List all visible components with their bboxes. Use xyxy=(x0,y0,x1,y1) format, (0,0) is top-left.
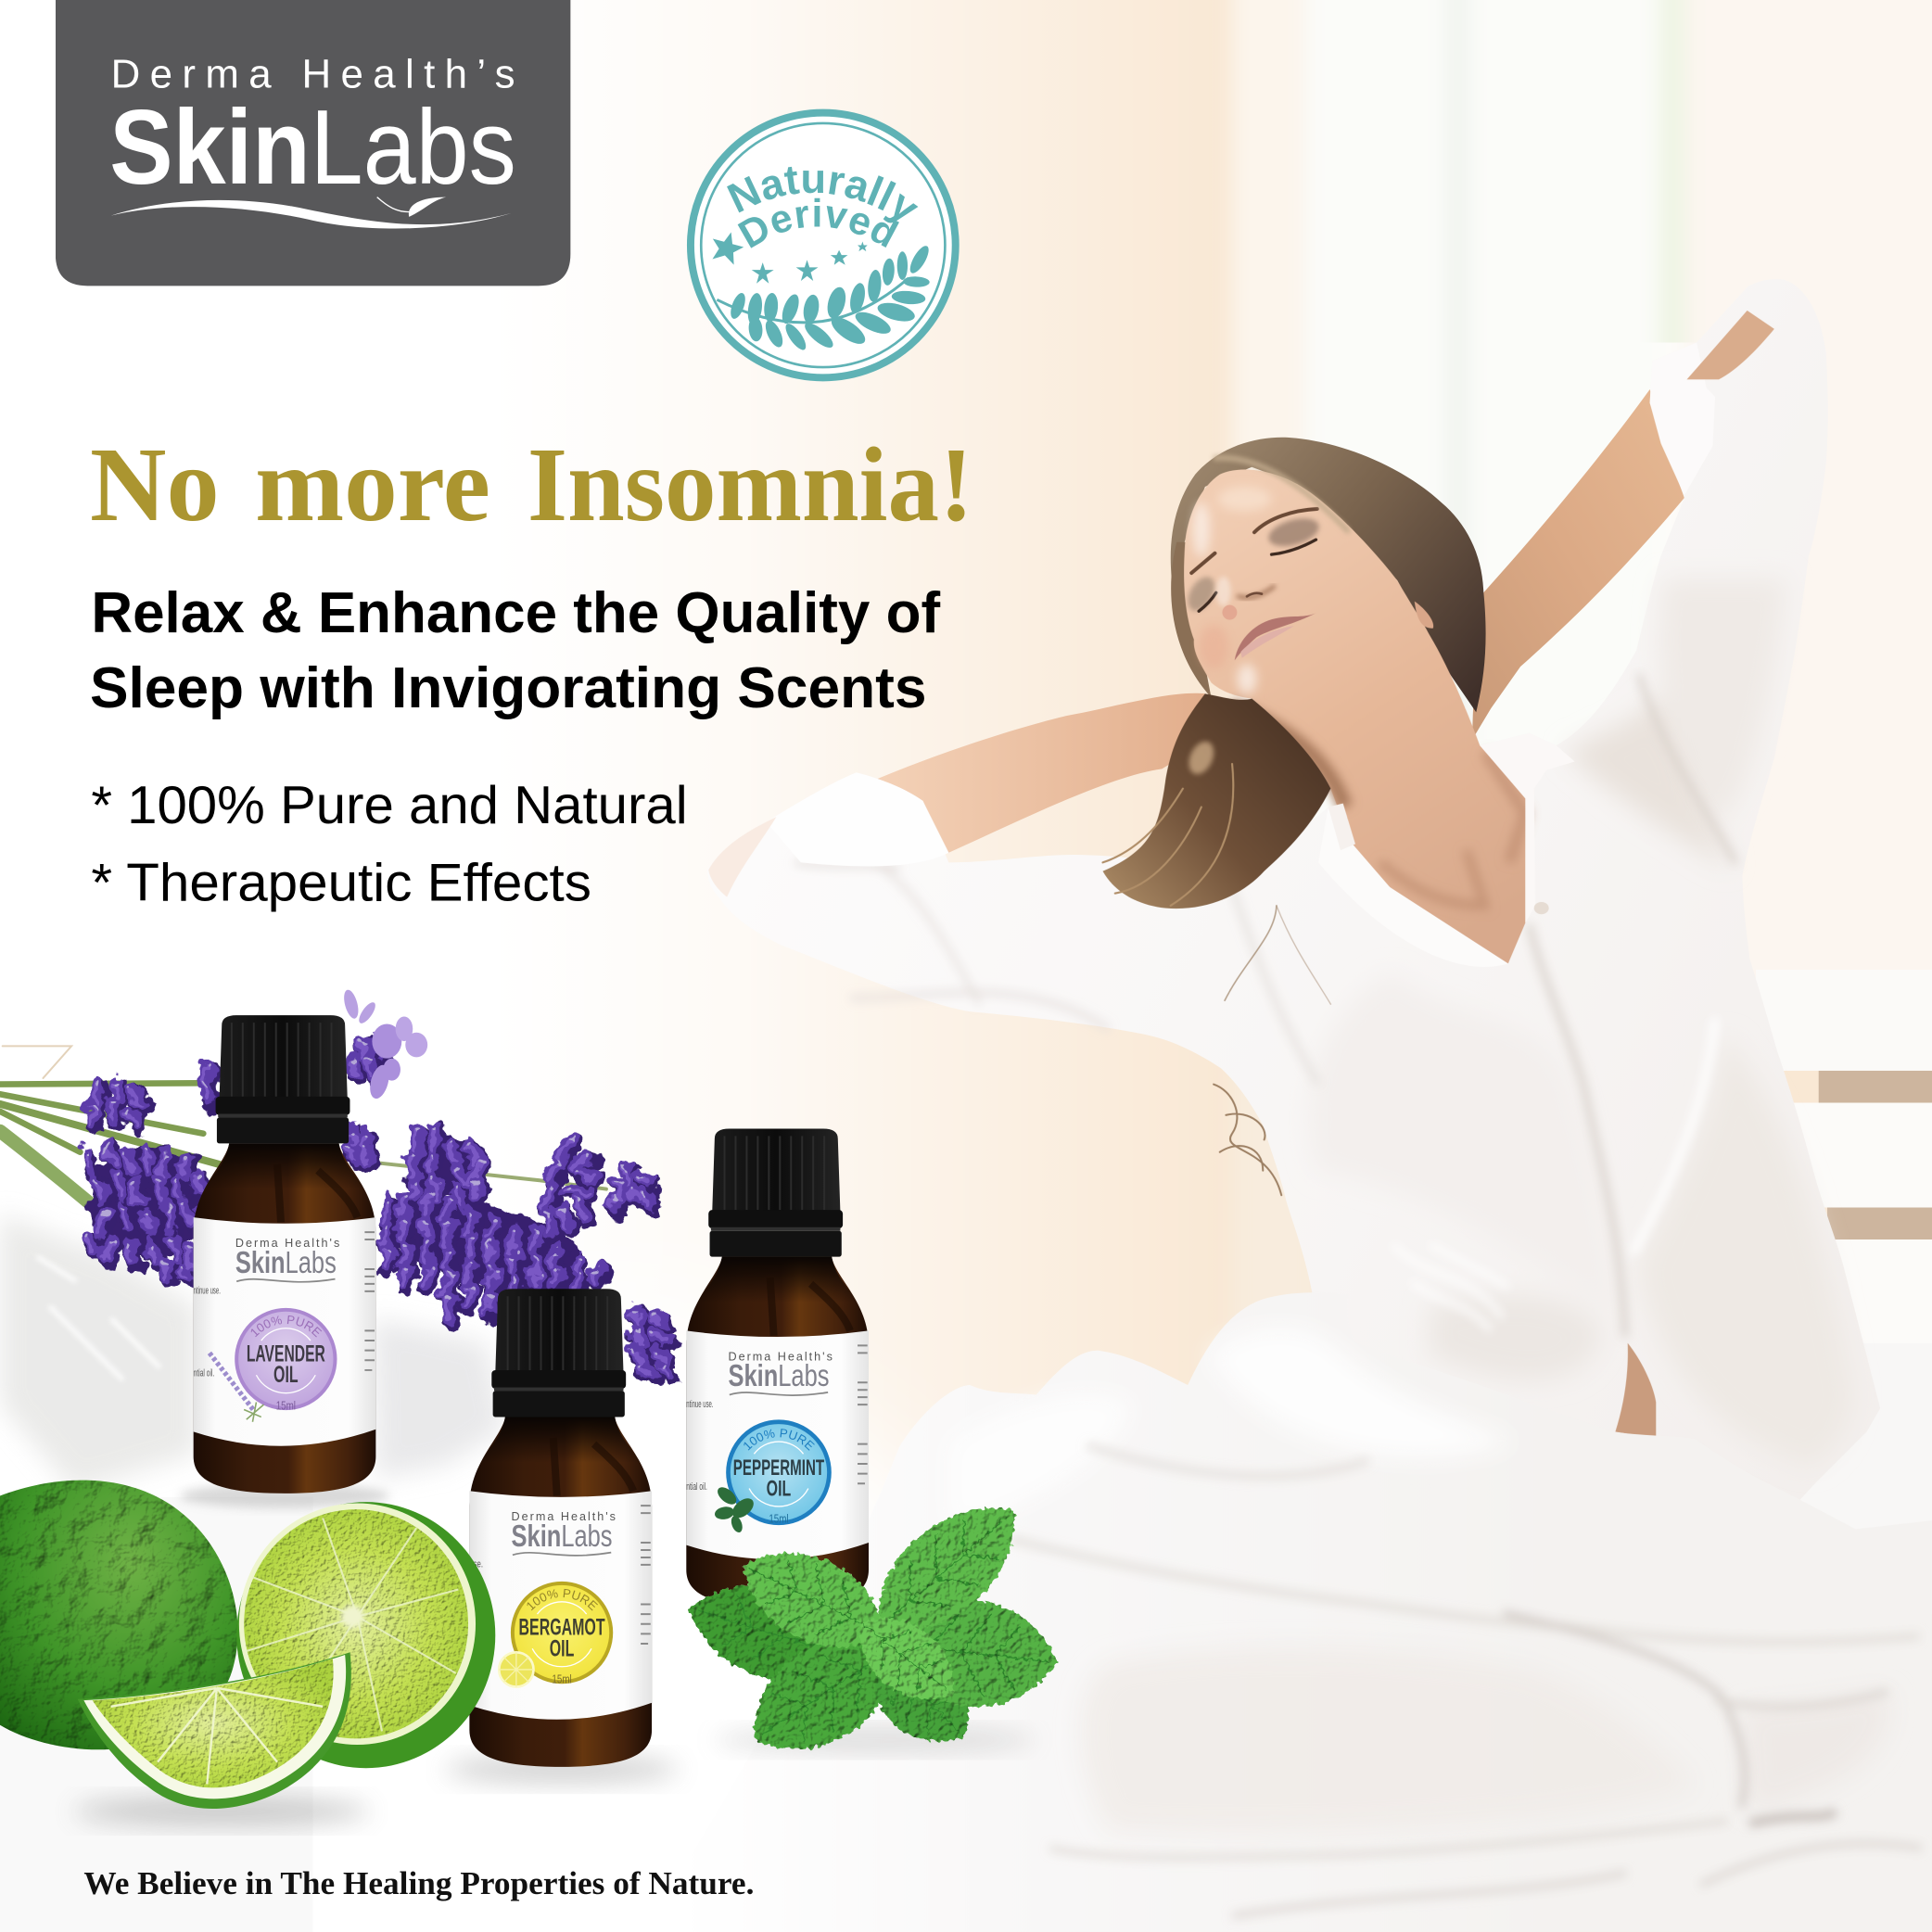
headboard xyxy=(1749,970,1932,1614)
hair back xyxy=(1171,438,1486,712)
lavender pale blossoms xyxy=(341,988,427,1100)
right arm xyxy=(1472,389,1684,739)
bottle: peppermint oil xyxy=(686,1129,869,1596)
white shirt xyxy=(707,279,1880,1528)
facial features xyxy=(1183,509,1322,669)
bergamot label badge: BERGAMOT xyxy=(519,1615,605,1641)
badge text: Naturally xyxy=(727,167,918,222)
heading xyxy=(90,426,973,543)
bottle: lavender oil: ntinue use. xyxy=(194,1286,221,1297)
lavender bunch xyxy=(0,988,670,1377)
lavender label badge: 100% PURE xyxy=(250,1315,323,1337)
peppermint label badge: PEPPERMINT xyxy=(733,1455,824,1481)
lavender label badge xyxy=(208,1307,337,1422)
heading: more xyxy=(255,426,490,543)
peppermint label badge: 100% PURE xyxy=(744,1429,815,1451)
hair strands and curls xyxy=(1103,737,1330,1195)
bergamot label badge xyxy=(498,1582,614,1688)
table shadows xyxy=(0,1214,1035,1932)
bergamot label badge: 100% PURE xyxy=(527,1589,598,1611)
bottle: bergamot oil: use. xyxy=(469,1559,483,1570)
lavender label badge: LAVENDER xyxy=(247,1341,325,1367)
peppermint label badge xyxy=(715,1419,832,1532)
tagline: We Believe in The Healing Properties of Nature. xyxy=(83,1866,754,1901)
bottle: bergamot oil xyxy=(469,1289,653,1767)
lime wedge xyxy=(78,1652,351,1809)
badge branch xyxy=(717,243,933,353)
bottle: peppermint oil: ntinue use. xyxy=(686,1399,714,1410)
shirt shading xyxy=(794,579,1853,1467)
bottle: peppermint oil: ntial oil. xyxy=(686,1481,707,1493)
lavender stems xyxy=(0,1046,606,1226)
logo text: SkinLabs: SkinLabs xyxy=(109,89,516,207)
badge stars xyxy=(707,228,868,284)
logo panel xyxy=(56,0,570,286)
logo text: Derma Health's: Derma Health’s xyxy=(111,51,515,96)
halved lime xyxy=(236,1502,495,1768)
peppermint label badge: OIL xyxy=(767,1477,791,1502)
face and neck xyxy=(1184,469,1525,963)
lavender label badge: OIL xyxy=(273,1362,299,1388)
left cuff skin xyxy=(708,817,776,897)
lavender flower spikes xyxy=(85,1035,670,1377)
ear xyxy=(1415,602,1433,629)
lavender label badge: 15ml xyxy=(276,1399,296,1412)
hair falling over shoulder xyxy=(1103,693,1330,909)
benefits list: * Therapeutic Effects xyxy=(91,854,591,913)
heading: No xyxy=(90,426,220,543)
mint leaves xyxy=(679,1481,1061,1776)
duvet xyxy=(641,1292,1932,1932)
subheading: Relax & Enhance the Quality of xyxy=(91,580,940,645)
duvet shading xyxy=(948,1328,1922,1916)
hair strip beside face xyxy=(1171,542,1211,697)
bottle: lavender oil: ntial oil. xyxy=(194,1368,214,1379)
logo swoosh and leaf xyxy=(111,197,512,229)
neck shading and highlights xyxy=(1193,487,1525,906)
whole bergamot fruit xyxy=(0,1481,238,1749)
subheading: Sleep with Invigorating Scents xyxy=(90,655,926,720)
shirt button xyxy=(1534,902,1549,914)
benefits list: * 100% Pure and Natural xyxy=(91,776,688,835)
benefits list xyxy=(91,776,688,913)
waist gap xyxy=(1615,1343,1656,1438)
bergamot label badge: OIL xyxy=(550,1635,574,1661)
collar xyxy=(1480,733,1575,922)
subheading xyxy=(90,580,940,720)
hair highlight xyxy=(1214,458,1349,532)
badge: naturally derived xyxy=(686,109,960,382)
badge: naturally derived: Derived xyxy=(738,198,899,248)
rolled right cuff xyxy=(1650,342,1715,495)
bergamot label badge: 15ml xyxy=(552,1673,572,1686)
woman stretching xyxy=(641,279,1932,1932)
peppermint label badge: 15ml xyxy=(769,1513,789,1526)
left cuff xyxy=(767,772,948,866)
cuff opening xyxy=(1687,311,1774,379)
heading: Insomnia! xyxy=(527,426,973,543)
bottle: lavender oil xyxy=(193,1015,376,1493)
left arm xyxy=(875,693,1232,853)
